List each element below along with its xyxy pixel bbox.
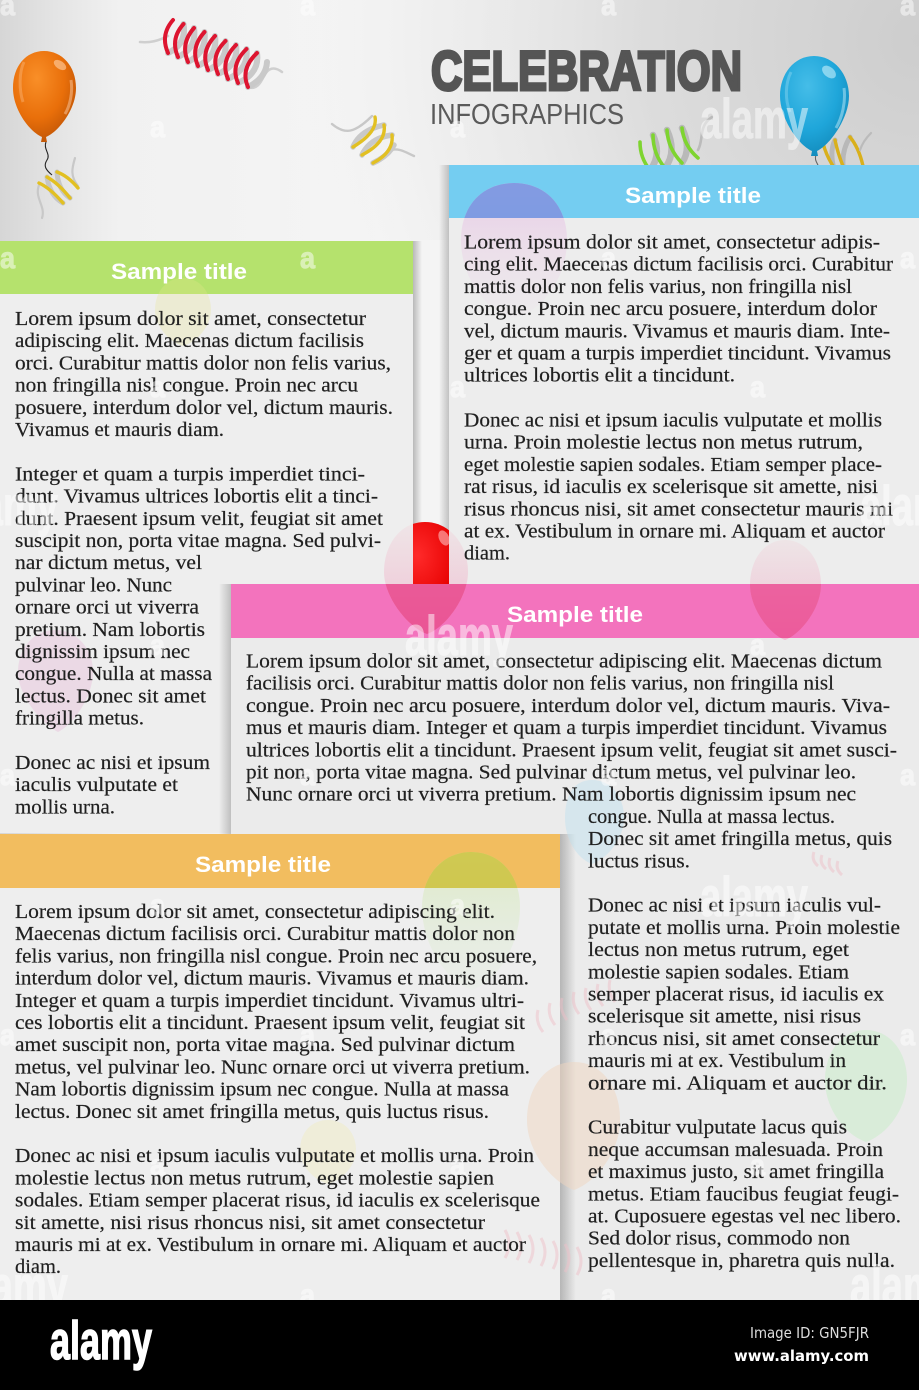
balloon: pale green right [825,1030,907,1142]
balloon: green over orange panel [422,852,520,966]
text block: orange panel: Donec ac nisi et ipsum iaculis vulputate et mollis urna. Proin [15,1145,534,1167]
text block: green panel: dunt. Praesent ipsum velit, feugiat sit amet [15,508,383,530]
watermarks: alamy [700,865,808,928]
watermarks: a [150,371,165,404]
watermarks: a [900,759,915,792]
text block: pink panel: rhoncus nisi, sit amet consectetur [588,1028,880,1050]
text block: green panel: Lorem ipsum dolor sit amet, consectetur [15,308,366,330]
text block: blue panel: rat risus, id iaculis ex scelerisque sit amette, nisi [464,476,878,498]
text block: blue panel: Donec ac nisi et ipsum iaculis vulputate et mollis [464,410,882,432]
heading: green panel: Sample title [111,259,247,284]
watermarks: a [900,1019,915,1052]
website: www.alamy.com [734,1347,869,1365]
watermarks: a [0,759,15,792]
watermarks: a [0,242,15,275]
icon: orange balloon [13,51,76,175]
watermarks: a [601,1019,616,1052]
text block: pink panel: pit non, porta vitae magna. Sed pulvinar dictum metus, vel pulvinar leo. [246,762,856,784]
balloon: faint yellow in orange panel [300,1120,356,1184]
text block: blue panel: congue. Proin nec arcu posuere, interdum dolor [464,298,877,320]
heading: blue panel: Sample title [625,183,761,208]
text block: pink panel: putate et mollis urna. Proin molestie [588,917,900,939]
watermarks: a [300,1279,315,1312]
text block: orange panel: felis varius, non fringilla nisl congue. Proin nec arcu posuere, [15,945,537,967]
text block: blue panel: ultrices lobortis elit a tincidunt. [464,365,735,387]
orange header bar [0,834,560,888]
watermarks: a [450,1149,465,1182]
text block: pink panel: metus. Etiam faucibus feugiat feugi- [588,1183,899,1205]
text block: orange panel: diam. [15,1256,61,1278]
text block: blue panel: cing elit. Maecenas dictum facilisis orci. Curabitur [464,254,893,276]
text block: green panel: lectus. Donec sit amet [15,685,206,707]
text block: pink panel: congue. Nulla at massa lectus. [588,806,835,828]
text block: green panel: non fringilla nisl congue. Proin nec arcu [15,375,358,397]
text block: orange panel: Nam lobortis dignissim ipsum nec congue. Nulla at massa [15,1079,509,1101]
text block: pink panel: congue. Proin nec arcu posuere, interdum dolor vel, dictum mauris. Viva- [246,695,890,717]
text block: orange panel: Integer et quam a turpis imperdiet tincidunt. Vivamus ultri- [15,990,524,1012]
faint streamers [505,852,842,1275]
text block: pink panel: pellentesque in, pharetra quis nulla. [588,1250,895,1272]
balloon: pale red over pink panel [384,522,468,634]
text block: blue panel: Lorem ipsum dolor sit amet, consectetur adipis- [464,232,880,254]
panel: orange [0,834,576,1300]
text block: orange panel: interdum dolor vel, dictum mauris. Vivamus et mauris diam. [15,968,529,990]
subtitle: INFOGRAPHICS [430,99,624,131]
watermarks: a [300,1019,315,1052]
text block: green panel: suscipit non, porta vitae magna. Sed pulvi- [15,530,381,552]
text block: pink panel: Sed dolor risus, commodo non [588,1228,850,1250]
text block: green panel [15,308,393,818]
balloon: faint pink in green panel [18,630,93,732]
balloon: faint blue in pink panel [565,780,624,864]
text block: orange panel [15,901,540,1278]
text block: green panel: ornare orci ut viverra [15,597,199,619]
text block: green panel: mollis urna. [15,796,115,818]
watermarks: a [450,371,465,404]
text block: orange panel: sit amette, nisi risus rhoncus nisi, sit amet consectetur [15,1212,485,1234]
watermarks: a [450,889,465,922]
icon: yellow streamer centre [332,116,414,163]
text block: pink panel: semper placerat risus, id iaculis ex [588,984,884,1006]
text block: green panel: Integer et quam a turpis imperdiet tinci- [15,463,365,485]
text block: pink panel: neque accumsan malesuada. Proin [588,1139,883,1161]
watermarks: a [150,889,165,922]
watermarks: a [750,1149,765,1182]
text block: green panel: pretium. Nam lobortis [15,619,205,641]
text block: pink panel: Curabitur vulputate lacus quis [588,1117,847,1139]
watermarks: a [450,111,465,144]
text block: blue panel: urna. Proin molestie lectus non metus rutrum, [464,432,863,454]
text block: pink panel: Nunc ornare orci ut viverra pretium. Nam lobortis dignissim ipsum nec [246,784,856,806]
text block: green panel: orci. Curabitur mattis dolor non felis varius, [15,352,391,374]
watermarks: a [750,371,765,404]
watermarks: alamy [700,87,808,150]
balloon: blue and pink at top of blue panel [461,183,567,280]
text block: green panel: pulvinar leo. Nunc [15,574,172,596]
text block: orange panel: metus, vel pulvinar leo. Nunc ornare orci ut viverra pretium. [15,1056,530,1078]
text block: pink panel: mauris mi at ex. Vestibulum in [588,1050,846,1072]
image id: Image ID: GN5FJR [750,1324,869,1342]
text block: pink panel: facilisis orci. Curabitur mattis dolor non felis varius, non fringilla nisl [246,673,834,695]
text block: orange panel: Maecenas dictum facilisis orci. Curabitur mattis dolor non [15,923,515,945]
balloon: pink at right [750,540,821,640]
watermarks: a [750,629,765,662]
text block: blue panel: ger et quam a turpis imperdiet tincidunt. Vivamus [464,342,891,364]
watermarks: a [0,1019,15,1052]
panel: green [0,241,422,833]
heading: pink panel: Sample title [507,602,643,627]
footer logo: alamy [50,1311,152,1371]
text block: orange panel: amet suscipit non, porta vitae magna. Sed pulvinar dictum [15,1034,515,1056]
text block: pink panel: Lorem ipsum dolor sit amet, consectetur adipiscing elit. Maecenas dictum [246,650,882,672]
text block: pink panel: ultrices lobortis elit a tincidunt. Praesent ipsum velit, feugiat sit amet susci- [246,739,897,761]
text block: pink panel: molestie sapien sodales. Etiam [588,961,849,983]
watermarks: a [150,1149,165,1182]
text block: blue panel: vel, dictum mauris. Vivamus et mauris diam. Inte- [464,320,890,342]
text block: green panel: congue. Nulla at massa [15,663,212,685]
text block: pink panel: scelerisque sit amette, nisi risus [588,1006,861,1028]
text block: orange panel: mauris mi at ex. Vestibulum in ornare mi. Aliquam et auctor [15,1234,526,1256]
text block: green panel: iaculis vulputate et [15,774,178,796]
watermarks: a [601,242,616,275]
text block: blue panel: eget molestie sapien sodales. Etiam semper place- [464,454,882,476]
text block: orange panel: molestie lectus non metus rutrum, eget molestie sapien [15,1167,494,1189]
text block: orange panel: Lorem ipsum dolor sit amet, consectetur adipiscing elit. [15,901,495,923]
text block: pink panel: mus et mauris diam. Integer et quam a turpis imperdiet tincidunt. Vivamus [246,717,887,739]
text block: pink panel: Donec sit amet fringilla metus, quis [588,828,892,850]
text block: pink panel: Donec ac nisi et ipsum iaculis vul- [588,895,881,917]
title: CELEBRATION [431,39,742,102]
icon: blue balloon [780,56,849,193]
watermarks: alamy [405,604,513,667]
watermarks: a [150,629,165,662]
green header bar [0,241,413,294]
text block: blue panel: diam. [464,543,510,565]
text block: pink panel: luctus risus. [588,850,690,872]
text block: green panel: dunt. Vivamus ultrices lobortis elit a tinci- [15,486,378,508]
panel: blue [439,165,919,584]
text block: orange panel: ces lobortis elit a tincidunt. Praesent ipsum velit, feugiat sit [15,1012,525,1034]
icon: yellow streamer behind blue balloon [823,133,871,166]
icon: red streamer top [140,20,282,88]
text block: green panel: dignissim ipsum nec [15,641,190,663]
text block: blue panel: at ex. Vestibulum in ornare mi. Aliquam et auctor [464,520,885,542]
translucent background balloons [18,183,907,1275]
footer bar [0,1300,919,1390]
text block: green panel: Donec ac nisi et ipsum [15,752,210,774]
icon: red balloon visible between panels [413,522,449,584]
blue header bar [449,165,919,218]
watermarks: a [150,111,165,144]
pink header bar [231,584,919,638]
text block: green panel: posuere, interdum dolor vel, dictum mauris. [15,397,393,419]
text block: blue panel: mattis dolor non felis varius, non fringilla nisl [464,276,852,298]
panel: pink [219,584,919,1300]
text block: orange panel: sodales. Etiam semper placerat risus, id iaculis ex scelerisque [15,1190,540,1212]
text block: orange panel: lectus. Donec sit amet fringilla metus, quis luctus risus. [15,1101,489,1123]
watermarks: a [900,242,915,275]
heading: orange panel: Sample title [195,852,331,877]
watermarks: a [601,1279,616,1312]
text block: green panel: fringilla metus. [15,708,144,730]
text block: green panel: adipiscing elit. Maecenas dictum facilisis [15,330,364,352]
text block: pink panel: lectus non metus rutrum, eget [588,939,849,961]
text block: pink panel: et maximus justo, sit amet fringilla [588,1161,884,1183]
icon: green streamer [640,117,712,170]
icon: yellow streamer under orange balloon [38,158,78,218]
watermarks: a [300,242,315,275]
text block: blue panel [464,232,893,565]
watermarks: a [300,759,315,792]
text block: blue panel: risus rhoncus nisi, sit amet consectetur mauris mi [464,498,893,520]
text block: pink panel: ornare mi. Aliquam et auctor dir. [588,1072,887,1094]
watermarks: a [601,759,616,792]
balloon: peach at panel edge [527,1062,620,1190]
text block: green panel: Vivamus et mauris diam. [15,419,224,441]
balloon: faint yellow in green panel [155,278,211,346]
text block: pink panel [246,650,901,1272]
text block: green panel: nar dictum metus, vel [15,552,202,574]
text block: pink panel: at. Cuposuere egestas vel nec libero. [588,1206,901,1228]
